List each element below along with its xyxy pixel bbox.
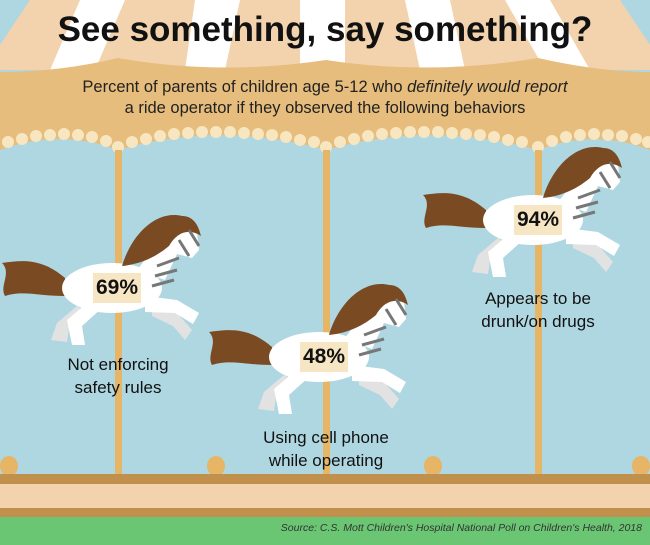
knobs (0, 456, 650, 476)
canopy band (0, 58, 650, 150)
label 3: Appears to be (485, 289, 591, 308)
label 1 (67, 355, 169, 397)
label 1: safety rules (75, 378, 161, 397)
subtitle: Percent of parents of children age 5-12 who definitely would report (82, 78, 568, 96)
label 2: while operating (269, 451, 383, 470)
source: Source: C.S. Mott Children's Hospital National Poll on Children's Health, 2018 (281, 522, 642, 534)
title: See something, say something? (58, 10, 592, 49)
platform (0, 474, 650, 545)
value 94%: 94% (517, 208, 559, 231)
label 3 (481, 289, 595, 331)
horse 1 (2, 215, 201, 345)
canopy stripes (0, 0, 650, 70)
subtitle: a ride operator if they observed the following behaviors (125, 99, 525, 117)
value 69%: 69% (96, 276, 138, 299)
label 3: drunk/on drugs (481, 312, 595, 331)
light dots (2, 126, 650, 153)
horse 3 (423, 147, 622, 277)
label 2: Using cell phone (263, 428, 389, 447)
label 1: Not enforcing (67, 355, 169, 374)
horse 2 (209, 284, 408, 414)
value 48%: 48% (303, 345, 345, 368)
poles (115, 150, 542, 475)
label 2 (263, 428, 389, 470)
subtitle (82, 78, 568, 117)
